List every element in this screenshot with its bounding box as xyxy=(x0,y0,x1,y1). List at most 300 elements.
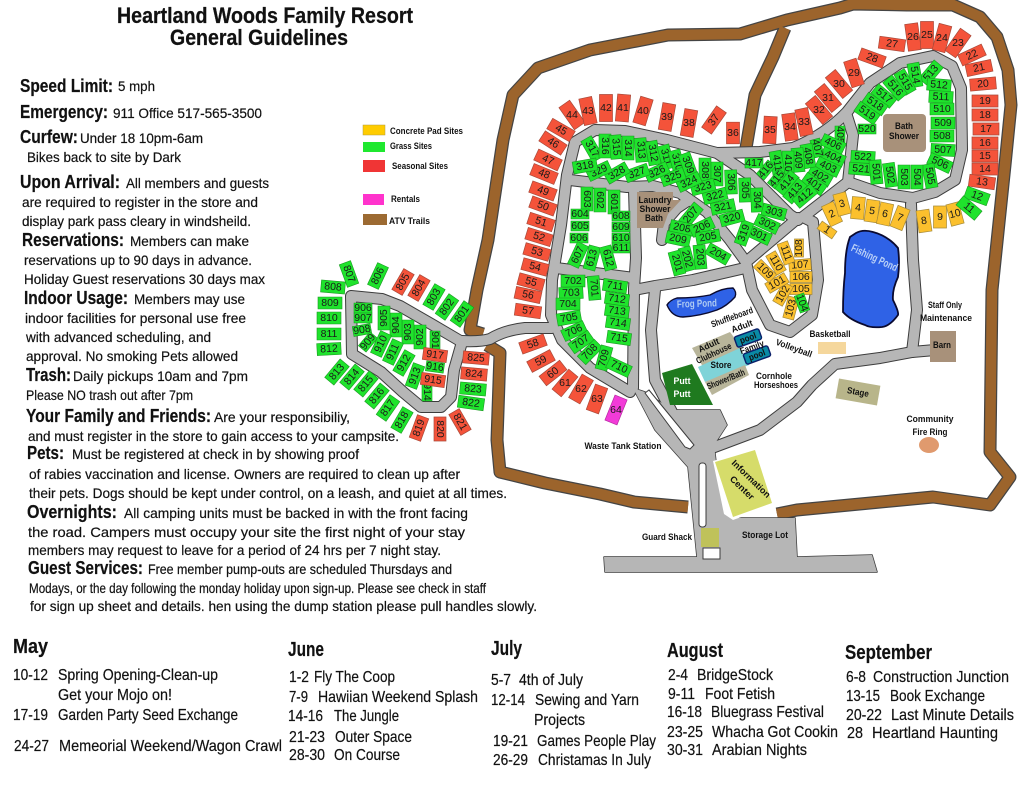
rule: pets: Pets: xyxy=(27,443,64,463)
map label: staff only maintenance: Maintenance xyxy=(920,313,972,323)
sites: seasonal west and north rows xyxy=(514,94,740,425)
store: Store xyxy=(710,360,732,370)
sites: grass 400s: 409 xyxy=(791,151,805,169)
sites: grass 300s: 307 xyxy=(711,165,723,183)
rule: curfew: Bikes back to site by Dark xyxy=(27,149,182,165)
sites: grass loop 500s: 509 xyxy=(934,117,952,129)
sites: grass 600s: 604 xyxy=(571,208,589,220)
sites: seasonal west and north rows: 37 xyxy=(706,112,722,128)
family pool xyxy=(743,345,771,365)
grass site 104: 104 xyxy=(793,293,811,313)
sites: grass 700s: 714 xyxy=(608,316,628,330)
sites: west loop 900s: 908 xyxy=(352,323,372,337)
sites: seasonal north-east and east rows: 32 xyxy=(813,104,825,116)
calendar: may: Garden Party Seed Exchange xyxy=(58,707,238,724)
sites: west loop 900s: 911 xyxy=(384,342,402,362)
rule: pets xyxy=(27,443,507,501)
calendar: may: 17-19 xyxy=(13,707,48,724)
family pool: pool xyxy=(747,347,767,363)
sites: seasonal north-east and east rows: 29 xyxy=(848,67,860,79)
sites: west loop 800s: 818 xyxy=(392,409,412,431)
calendar: july: 5-7 xyxy=(491,672,511,689)
sites: grass 400s: 413 xyxy=(785,180,805,202)
sites: west loop 800s: 814 xyxy=(342,366,362,388)
calendar: june: 21-23 xyxy=(289,729,325,746)
map label: cornhole horseshoes: Cornhole xyxy=(756,371,792,381)
information center: Information xyxy=(730,458,773,500)
bath shower building xyxy=(883,114,926,152)
rule: speed limit: Speed Limit: xyxy=(20,76,113,96)
sites: west loop 800s: 803 xyxy=(424,286,444,308)
sites: grass 700s: 705 xyxy=(559,311,579,325)
sites: grass 300s: 324 xyxy=(679,173,700,191)
sites: concrete pad sites: 7 xyxy=(895,211,905,225)
sites: seasonal west and north rows: 46 xyxy=(545,135,561,151)
calendar: september: September xyxy=(845,642,932,664)
sites: concrete pad sites: 111 xyxy=(778,243,794,263)
sites: grass 300s: 314 xyxy=(622,139,634,157)
sites: west loop 800s: 824 xyxy=(465,367,483,381)
sites: grass loop 500s: 514 xyxy=(908,65,922,85)
sites: seasonal north-east and east rows: 28 xyxy=(864,50,880,66)
rule: guest services: for sign up sheet and details. hen using the dump station please pull handles slowly. xyxy=(30,598,537,614)
sites: seasonal west and north rows: 47 xyxy=(540,152,556,168)
stage: Stage xyxy=(846,385,870,399)
map label: waste tank station: Waste Tank Station xyxy=(584,441,662,451)
rental site 64: 64 xyxy=(610,404,622,416)
sites: grass loop 500s: 522 xyxy=(854,151,872,163)
sites: grass loop 500s: 504 xyxy=(911,168,923,186)
basketball court: Basketball xyxy=(810,329,850,339)
map label: cornhole horseshoes xyxy=(754,371,798,390)
sites: grass 400s: 407 xyxy=(809,138,825,158)
sites: west loop 800s: 804 xyxy=(409,277,429,299)
sites: seasonal north-east and east rows: 18 xyxy=(979,109,991,121)
sites: grass 400s: 412 xyxy=(794,186,816,206)
calendar: july: 26-29 xyxy=(493,752,528,769)
adult pool xyxy=(734,328,762,348)
sites: seasonal north-east and east rows: 23 xyxy=(952,37,964,49)
bath shower building: Shower xyxy=(889,131,919,141)
sites: seasonal west and north rows: 52 xyxy=(532,230,546,244)
sites: grass 300s: 301 xyxy=(749,226,770,244)
sites: grass 200s: 202 xyxy=(679,249,695,269)
sites: grass loop 500s: 521 xyxy=(852,162,870,176)
sites: grass 300s: 302 xyxy=(757,215,778,233)
calendar: august: 2-4 xyxy=(668,667,688,684)
rule: reservations: Members can make xyxy=(130,233,249,249)
barn: Barn xyxy=(933,340,951,350)
sites: west loop 900s: 916 xyxy=(425,360,445,374)
calendar: september: Heartland Haunting xyxy=(872,725,998,742)
sites: west loop 800s: 801 xyxy=(452,303,472,325)
sites: grass 300s: 327 xyxy=(627,164,647,182)
sites: seasonal north-east and east rows: 35 xyxy=(764,124,776,136)
sites: west loop 900s: 906 xyxy=(354,302,372,314)
laundry shower bath building: Shower xyxy=(640,204,671,214)
sites: grass loop 500s: 502 xyxy=(883,165,897,185)
sites: seasonal west and north rows: 55 xyxy=(524,275,538,289)
calendar: may xyxy=(13,636,282,755)
sites: grass 600s: 611 xyxy=(613,242,630,254)
sites: grass 400s: 416 xyxy=(756,159,776,181)
sites: grass 600s: 607 xyxy=(569,244,587,265)
sites: seasonal west and north rows: 53 xyxy=(530,245,544,259)
sites: grass 400s: 403 xyxy=(818,158,839,176)
sites: west loop 900s: 905 xyxy=(378,309,390,327)
map label: family pool: Family xyxy=(739,338,765,356)
legend item: seasonal sites: Seasonal Sites xyxy=(392,161,448,171)
laundry shower bath building xyxy=(637,192,681,228)
legend item: concrete pad sites: Concrete Pad Sites xyxy=(390,126,463,136)
calendar: may: 24-27 xyxy=(14,738,49,755)
map label: volleyball: Volleyball xyxy=(774,337,814,359)
calendar: august: 23-25 xyxy=(667,724,703,741)
sites: west loop 800s: 815 xyxy=(356,373,376,395)
rule: emergency: Emergency: xyxy=(20,102,108,122)
rule: overnights: All camping units must be backed in with the front facing xyxy=(124,505,468,521)
calendar: may: Spring Opening-Clean-up xyxy=(58,667,218,684)
sites: grass 400s: 406 xyxy=(823,135,844,153)
sites: grass loop 500s: 519 xyxy=(856,103,878,123)
sites: grass 400s: 411 xyxy=(770,154,784,172)
rule: overnights xyxy=(27,502,468,558)
calendar: june: 28-30 xyxy=(289,747,325,764)
rule: emergency: 911 Office 517-565-3500 xyxy=(113,105,262,121)
sites: seasonal west and north rows: 63 xyxy=(591,393,603,405)
sites: seasonal north-east and east rows: 22 xyxy=(964,47,980,63)
bath shower building: Bath xyxy=(895,121,913,131)
rule: upon arrival: All members and guests xyxy=(126,175,269,191)
title xyxy=(117,3,414,50)
sites: west loop 900s: 915 xyxy=(423,373,443,387)
sites: grass 300s: 305 xyxy=(739,181,751,199)
sites: west loop 800s: 823 xyxy=(464,382,482,396)
rule: speed limit: 5 mph xyxy=(118,78,155,94)
sites: seasonal west and north rows: 54 xyxy=(528,260,542,274)
sites: seasonal west and north rows: 44 xyxy=(566,109,578,121)
putt putt: Putt xyxy=(674,376,690,386)
sites: seasonal west and north rows: 41 xyxy=(617,102,629,114)
sites: seasonal west and north rows: 51 xyxy=(534,214,549,230)
sites: west loop 800s: 809 xyxy=(321,297,339,309)
sites: grass 700s: 712 xyxy=(607,292,627,306)
barn xyxy=(930,331,956,362)
sites: seasonal north-east and east rows: 15 xyxy=(979,150,991,162)
shower bath: Shower/Bath xyxy=(705,367,746,391)
sites: seasonal north-east and east rows: 12 xyxy=(969,188,985,204)
sites: grass 600s xyxy=(567,187,630,271)
sites: seasonal west and north rows: 57 xyxy=(521,304,535,318)
legend item: rentals: Rentals xyxy=(391,194,420,204)
calendar: july: Sewing and Yarn xyxy=(535,692,639,709)
sites: concrete pad sites: 110 xyxy=(767,253,785,273)
sites: seasonal west and north rows: 62 xyxy=(575,383,587,395)
sites: concrete pad sites: 109 xyxy=(755,261,776,282)
sites: west loop 800s xyxy=(317,261,489,441)
rule: emergency xyxy=(20,102,262,122)
sites: west loop 800s: 822 xyxy=(461,396,481,410)
sites: grass 200s: 208 xyxy=(672,220,692,236)
sites: west loop 800s: 808 xyxy=(324,280,342,294)
calendar: june xyxy=(288,639,478,764)
sites: seasonal west and north rows: 39 xyxy=(661,111,673,123)
rule: your family and friends xyxy=(26,406,399,444)
rule: reservations: reservations up to 90 days in advance. xyxy=(24,252,252,268)
calendar: august: 16-18 xyxy=(667,704,702,721)
sites: grass 700s: 713 xyxy=(607,304,627,318)
sites: seasonal north-east and east rows: 31 xyxy=(822,92,834,104)
adult pool: pool xyxy=(738,330,758,346)
sites: grass 300s: 306 xyxy=(725,173,737,191)
sites: grass 300s: 313 xyxy=(634,141,648,159)
sites: grass 600s: 605 xyxy=(571,220,589,232)
sites: grass 200s: 207 xyxy=(681,204,701,226)
rule: indoor usage: indoor facilities for personal use free xyxy=(25,310,246,326)
sites: west loop 900s: 909 xyxy=(358,331,378,353)
sites: seasonal west and north rows: 56 xyxy=(521,288,535,302)
map label: shuffleboard: Shuffleboard xyxy=(710,305,754,329)
sites: seasonal north-east and east rows: 24 xyxy=(936,32,948,44)
sites: seasonal north-east and east rows: 11 xyxy=(961,200,977,216)
sites: grass 300s: 325 xyxy=(663,168,683,186)
sites: grass 700s: 709 xyxy=(596,348,612,368)
sites: grass loop 500s: 513 xyxy=(921,62,941,84)
sites: grass loop 500s: 501 xyxy=(869,163,883,181)
calendar: august: Whacha Got Cookin xyxy=(712,724,838,741)
sites: grass 300s: 315 xyxy=(609,138,623,156)
sites: seasonal west and north rows: 49 xyxy=(535,183,551,199)
sites: seasonal north-east and east rows: 19 xyxy=(979,95,991,107)
adult clubhouse: Adult xyxy=(697,336,721,354)
sites: grass 400s: 410 xyxy=(782,154,794,172)
rule: trash: Daily pickups 10am and 7pm xyxy=(73,368,248,384)
sites: grass 300s xyxy=(572,134,787,246)
calendar: june: 1-2 xyxy=(289,669,309,686)
sites: grass 400s: 415 xyxy=(767,168,787,190)
sites: seasonal north-east and east rows: 34 xyxy=(784,121,796,133)
sites: west loop 800s: 817 xyxy=(378,397,398,419)
sites: grass 600s: 606 xyxy=(570,232,588,244)
calendar: june: June xyxy=(288,639,324,661)
sites: seasonal west and north rows: 45 xyxy=(553,122,569,138)
sites: grass 300s: 316 xyxy=(599,137,611,155)
frog pond xyxy=(667,288,736,317)
calendar: may: 10-12 xyxy=(13,667,48,684)
sites: grass 300s: 317 xyxy=(582,138,602,160)
community fire ring: Community xyxy=(906,414,954,424)
sites: grass 200s: 204 xyxy=(707,244,729,264)
sites: concrete pad sites: 107 xyxy=(791,258,809,272)
sites: grass 700s: 703 xyxy=(562,287,580,299)
rule: curfew: Under 18 10pm-6am xyxy=(80,130,203,146)
rental site 64 xyxy=(605,395,627,425)
rule: guest services: Free member pump-outs are scheduled Thursdays and xyxy=(148,561,452,577)
sites: seasonal north-east and east rows: 25 xyxy=(921,29,933,41)
rule: trash xyxy=(26,365,248,403)
sites: west loop 900s: 907 xyxy=(354,312,372,324)
fishing pond: Fishing Pond xyxy=(849,242,899,274)
title: Heartland Woods Family Resort xyxy=(117,3,414,28)
sites: west loop 800s: 812 xyxy=(320,343,338,355)
sites: west loop 800s: 819 xyxy=(410,418,428,438)
putt putt: Putt xyxy=(674,389,690,399)
sites: grass 600s: 613 xyxy=(584,248,600,268)
sites: grass 400s: 404 xyxy=(823,148,844,166)
sites: grass loop 500s: 511 xyxy=(932,91,950,103)
sites: grass 300s: 304 xyxy=(751,191,763,209)
map label: adult pool: Adult xyxy=(730,318,754,335)
sites: grass loop 500s: 520 xyxy=(858,123,876,135)
sites: seasonal west and north rows: 40 xyxy=(637,105,649,117)
sites: grass loop 500s: 510 xyxy=(933,103,951,115)
rule: reservations xyxy=(22,230,265,287)
atv trails xyxy=(470,4,1011,514)
title: General Guidelines xyxy=(170,25,348,50)
basketball court xyxy=(810,329,850,354)
sites: concrete pad sites xyxy=(753,192,964,320)
rule: pets: of rabies vaccination and license. Owners are required to clean up after xyxy=(29,466,460,482)
calendar: july: July xyxy=(491,638,523,660)
sites: west loop 900s xyxy=(352,302,448,401)
legend xyxy=(363,125,463,226)
calendar: august: Bluegrass Festival xyxy=(711,704,824,721)
sites: seasonal west and north rows: 58 xyxy=(525,336,541,352)
rule: guest services: Guest Services: xyxy=(28,558,143,578)
calendar: july: 4th of July xyxy=(519,672,583,689)
sites: grass 300s: 329 xyxy=(589,162,610,180)
sites: concrete pad sites: 105 xyxy=(792,283,810,295)
rule: reservations: Holiday Guest reservations 30 days max xyxy=(24,271,265,287)
sites: concrete pad sites: 101 xyxy=(766,273,788,293)
rule: guest services xyxy=(28,558,537,614)
sites: west loop 800s: 810 xyxy=(320,312,338,324)
sites: seasonal north-east and east rows xyxy=(763,22,999,220)
calendar: june: 14-16 xyxy=(288,708,323,725)
sites: grass loop 500s: 517 xyxy=(873,86,895,106)
calendar: june: Outer Space xyxy=(335,729,412,746)
sites: grass 700s: 708 xyxy=(580,341,601,362)
calendar: june: On Course xyxy=(334,747,400,764)
sites: concrete pad sites: 9 xyxy=(937,211,943,223)
map label: cornhole horseshoes: Horseshoes xyxy=(754,380,798,390)
putt putt xyxy=(662,364,713,405)
sites: west loop 800s: 825 xyxy=(467,351,485,365)
community fire ring: Fire Ring xyxy=(912,427,948,437)
sites: grass loop 500s: 515 xyxy=(895,71,915,93)
sites: concrete pad sites: 10 xyxy=(948,207,962,221)
sites: seasonal north-east and east rows: 14 xyxy=(979,163,991,175)
rule: curfew: Curfew: xyxy=(20,127,78,147)
map: resort xyxy=(317,4,1011,572)
guard shack xyxy=(642,528,719,547)
rule: reservations: Reservations: xyxy=(22,230,124,250)
calendar: may: Get your Mojo on! xyxy=(58,687,172,704)
roads xyxy=(351,56,962,572)
calendar: june: The Jungle xyxy=(334,708,399,725)
sites: seasonal west and north rows: 60 xyxy=(545,365,561,381)
sites: seasonal north-east and east rows: 33 xyxy=(798,116,810,128)
sites: west loop 900s: 917 xyxy=(425,348,445,362)
calendar: july: 12-14 xyxy=(491,692,525,709)
sites: west loop 900s: 904 xyxy=(390,316,402,334)
sites: grass loop 500s: 506 xyxy=(930,154,951,172)
sites: seasonal north-east and east rows: 20 xyxy=(977,78,989,90)
calendar: august: August xyxy=(667,640,723,662)
sites: west loop 800s: 802 xyxy=(437,296,457,318)
sites: concrete pad sites: 1 xyxy=(821,223,833,237)
sites: west loop 800s: 813 xyxy=(327,361,347,383)
rule: upon arrival: display park pass cleary in windsheild. xyxy=(22,213,251,229)
rule: guest services: Modays, or the day following the monday holiday upon sign-up. Please see check in staff xyxy=(29,580,486,596)
calendar: july: Christamas In July xyxy=(538,752,651,769)
sites: seasonal west and north rows: 59 xyxy=(533,353,549,369)
calendar: june: 7-9 xyxy=(289,689,308,706)
rule: your family and friends: and must register in the store to gain access to your campsite. xyxy=(28,428,399,444)
sites: seasonal north-east and east rows: 17 xyxy=(980,123,992,135)
calendar: september: 20-22 xyxy=(846,707,882,724)
sites: west loop 900s: 914 xyxy=(421,383,433,401)
legend item: grass sites: Grass Sites xyxy=(390,141,432,151)
rule: indoor usage: Indoor Usage: xyxy=(24,288,128,308)
rule: indoor usage: approval. No smoking Pets allowed xyxy=(26,348,238,364)
calendar: august: 30-31 xyxy=(667,742,703,759)
sites: grass 400s: 401 xyxy=(803,174,825,194)
sites: grass 700s: 706 xyxy=(564,322,585,340)
events calendar xyxy=(13,636,1014,769)
sites: grass 300s: 326 xyxy=(647,163,668,181)
sites: seasonal north-east and east rows: 16 xyxy=(979,137,991,149)
map label: storage lot: Storage Lot xyxy=(742,530,788,540)
calendar: july: Projects xyxy=(534,712,585,729)
sites: concrete pad sites: 4 xyxy=(855,202,862,214)
sites: grass 300s: 322 xyxy=(705,188,725,204)
calendar: may: May xyxy=(13,636,49,658)
rule: upon arrival: are required to register in the store and xyxy=(22,194,258,210)
sites: grass loop 500s: 503 xyxy=(898,168,910,186)
guard shack: Guard Shack xyxy=(642,532,693,542)
sites: west loop 800s: 816 xyxy=(367,385,387,407)
sites: grass 700s: 701 xyxy=(587,279,601,297)
fishing pond xyxy=(843,231,899,327)
store xyxy=(698,348,749,382)
sites: grass 300s: 310 xyxy=(669,152,685,172)
sites: concrete pad sites: 6 xyxy=(881,208,889,221)
sites: west loop 900s: 912 xyxy=(394,352,414,374)
sites: seasonal west and north rows: 38 xyxy=(683,117,695,129)
sites: concrete pad sites: 106 xyxy=(792,271,810,283)
rule: overnights: Overnights: xyxy=(27,502,117,522)
sites: grass loop 500s: 512 xyxy=(930,78,948,92)
sites: grass 700s: 704 xyxy=(559,298,577,310)
sites: grass loop 500s: 505 xyxy=(923,166,937,186)
sites: seasonal north-east and east rows: 13 xyxy=(975,175,989,189)
rule: indoor usage: with advanced scheduling, and xyxy=(25,329,211,345)
sites: grass 700s xyxy=(556,275,632,378)
sites: grass 600s: 601 xyxy=(608,193,620,211)
sites: west loop 900s: 903 xyxy=(402,323,414,341)
rule: pets: their pets. Dogs should be kept under control, on a leash, and quiet at all times. xyxy=(29,485,507,501)
sites: grass 300s: 319 xyxy=(735,223,753,243)
sites: grass 200s: 205 xyxy=(698,230,718,244)
calendar: september: Last Minute Details xyxy=(891,707,1014,724)
rule: upon arrival: Upon Arrival: xyxy=(20,172,120,192)
sites: seasonal north-east and east rows: 26 xyxy=(907,31,919,43)
calendar: august: Foot Fetish xyxy=(705,686,775,703)
sites: grass 600s: 612 xyxy=(600,248,616,268)
sites: grass 200s xyxy=(665,202,731,276)
rule: curfew xyxy=(20,127,203,165)
